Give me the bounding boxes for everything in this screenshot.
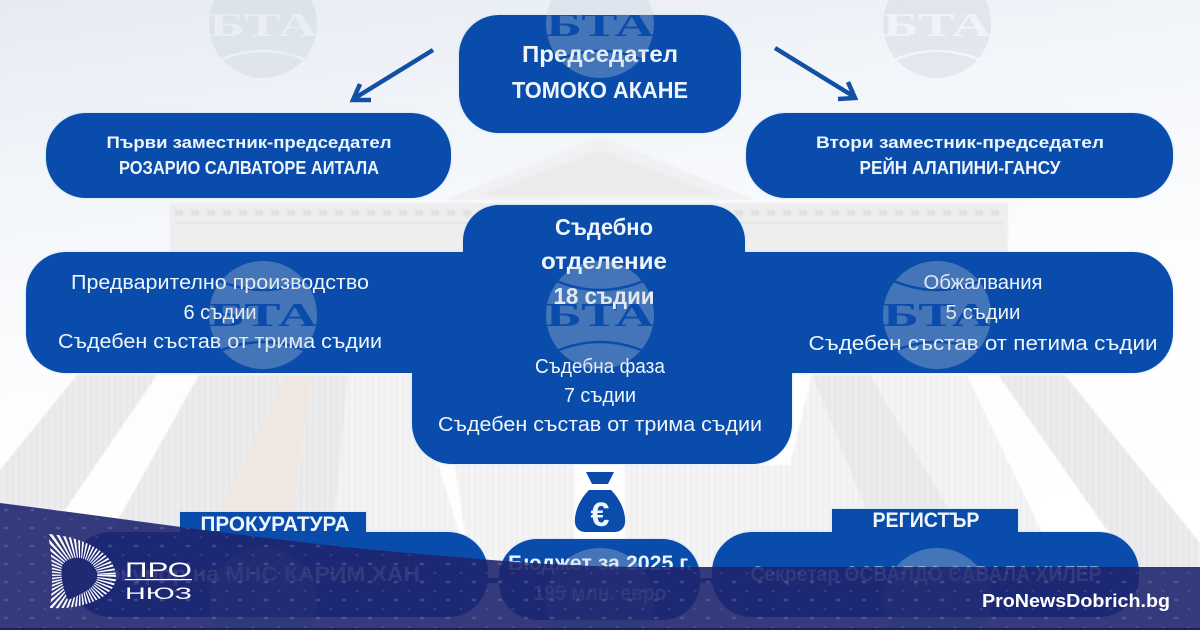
icon: money bag: €	[591, 496, 610, 534]
connector lines	[488, 578, 712, 583]
panel: budget: Бюджет за 2025 г.	[508, 552, 692, 575]
panel: first deputy	[46, 113, 451, 198]
watermark: BTA agency stamps	[209, 0, 991, 567]
appeals text: Съдебен състав от петима съдии	[808, 333, 1158, 355]
icon: money bag	[575, 472, 625, 534]
panel: second deputy	[746, 113, 1173, 198]
trial text: Съдебен състав от трима съдии	[438, 414, 762, 436]
panel: first deputy: РОЗАРИО САЛВАТОРЕ АИТАЛА	[119, 158, 379, 178]
arrow: to first deputy	[353, 50, 433, 100]
panel: prosecution: ПРОКУРАТУРА	[200, 513, 350, 536]
logo wordmark: ПРО	[125, 559, 192, 582]
logo wordmark: НЮЗ	[125, 584, 192, 603]
division heading: Съдебно	[555, 214, 653, 240]
logo wordmark	[125, 559, 192, 603]
panel: judicial division	[26, 205, 1173, 464]
trial text: 7 съдии	[564, 385, 636, 407]
division heading: 18 съдии	[554, 283, 654, 309]
site name: ProNewsDobrich.bg	[982, 591, 1170, 611]
pre-trial text: Предварително производство	[71, 272, 369, 294]
panel: registry	[712, 509, 1139, 617]
panel: prosecution	[71, 512, 488, 617]
logo mark	[54, 549, 106, 601]
panel: registry: РЕГИСТЪР	[872, 509, 980, 532]
footer band	[0, 503, 1200, 630]
appeals text: Обжалвания	[924, 272, 1042, 294]
trial text: Съдебна фаза	[535, 356, 666, 378]
panel: second deputy: РЕЙН АЛАПИНИ-ГАНСУ	[860, 157, 1061, 178]
panel: prosecution: Прокурор на МНС КАРИМ ХАН	[76, 563, 420, 586]
panel: budget: 195 млн. евро	[534, 582, 666, 605]
pre-trial text: 6 съдии	[184, 302, 256, 324]
appeals text: 5 съдии	[946, 302, 1020, 324]
panel: second deputy: Втори заместник-председател	[816, 133, 1104, 152]
panel: chair: Председател	[522, 41, 678, 67]
division heading: отделение	[541, 248, 667, 274]
panel: first deputy: Първи заместник-председател	[106, 133, 392, 152]
panel: chair	[459, 15, 741, 133]
pre-trial text: Съдебен състав от трима съдии	[58, 331, 382, 353]
division heading	[541, 214, 667, 309]
pre-trial text	[58, 272, 382, 353]
appeals text	[808, 272, 1158, 355]
panel: budget	[499, 539, 700, 620]
panel: chair: ТОМОКО АКАНЕ	[512, 77, 688, 103]
trial text	[438, 356, 762, 436]
arrow: to second deputy	[775, 48, 855, 99]
panel: registry: Секретар ОСВАЛДО САВАЛА ХИЛЕР	[750, 563, 1102, 586]
logo: ПРО НЮЗ	[54, 549, 192, 603]
courthouse building	[0, 136, 1200, 570]
